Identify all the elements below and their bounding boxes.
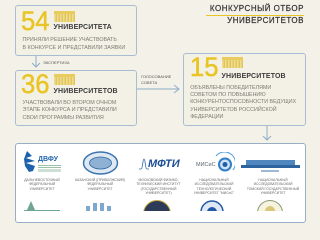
label: council vote: СОВЕТА xyxy=(141,80,157,85)
logo text: МФТИ xyxy=(148,158,180,170)
caption: MISiS: НАЦИОНАЛЬНЫЙ xyxy=(199,178,229,182)
caption: DVFU: ФЕДЕРАЛЬНЫЙ xyxy=(29,182,55,186)
text: 54: ПРИНЯЛИ РЕШЕНИЕ УЧАСТВОВАТЬ xyxy=(22,36,117,42)
label: council vote: ГОЛОСОВАНИЕ xyxy=(141,74,171,79)
panel: 15 universities xyxy=(183,53,306,126)
caption: MIPT: (ГОСУДАРСТВЕННЫЙ xyxy=(141,187,176,191)
text: 36: СВОИ ПРОГРАММЫ РАЗВИТИЯ xyxy=(22,115,104,121)
text: 15 xyxy=(190,85,296,120)
number 54: 54 xyxy=(20,6,49,36)
icon: building xyxy=(54,74,74,84)
caption: MIPT: УНИВЕРСИТЕТ) xyxy=(145,191,172,195)
icon: ring xyxy=(216,152,235,172)
logo: MISiS xyxy=(196,152,235,172)
logo: DVFU xyxy=(24,151,61,172)
caption: Kazan: КАЗАНСКИЙ (ПРИВОЛЖСКИЙ) xyxy=(75,178,125,182)
text: 36 xyxy=(22,100,117,121)
icon: building xyxy=(222,56,242,68)
text: 15: ФЕДЕРАЦИИ xyxy=(190,114,223,120)
logo: Tomsk xyxy=(241,160,300,172)
caption: Tomsk: ИССЛЕДОВАТЕЛЬСКИЙ xyxy=(254,182,292,186)
text: 54: В КОНКУРСЕ И ПРЕДСТАВИЛИ ЗАЯВКИ xyxy=(22,44,125,50)
logo: MIPT xyxy=(139,158,180,170)
caption: Kazan: ФЕДЕРАЛЬНЫЙ xyxy=(87,182,113,186)
caption: Tomsk: НАЦИОНАЛЬНЫЙ xyxy=(258,178,288,182)
number 15: 15 xyxy=(190,52,219,82)
caption: MISiS: ТЕХНОЛОГИЧЕСКИЙ xyxy=(197,187,231,191)
caption: DVFU xyxy=(24,178,60,191)
caption: Tomsk: УНИВЕРСИТЕТ xyxy=(260,191,286,195)
logo: row 2, fourth xyxy=(200,200,224,211)
title xyxy=(206,3,304,24)
text: 36: УЧАСТВОВАЛИ ВО ВТОРОМ ОЧНОМ xyxy=(22,100,116,106)
logo text: ДВФУ xyxy=(38,156,58,162)
caption: DVFU: ДАЛЬНЕВОСТОЧНЫЙ xyxy=(24,178,60,182)
text: 15: УНИВЕРСИТЕТОВ РОССИЙСКОЙ xyxy=(190,107,277,113)
logo text: МИСиС xyxy=(196,162,216,168)
title: КОНКУРСНЫЙ ОТБОР xyxy=(210,4,304,13)
heading: 54: УНИВЕРСИТЕТА xyxy=(54,24,112,31)
panel: university logos xyxy=(15,143,306,223)
icon: sail xyxy=(24,151,35,172)
caption: MISiS: ИССЛЕДОВАТЕЛЬСКИЙ xyxy=(195,182,233,186)
panel: 36 universities xyxy=(15,70,137,126)
panel: 54 universities xyxy=(15,5,137,56)
text: 36: ЭТАПЕ КОНКУРСА И ПРЕДСТАВИЛИ xyxy=(22,107,117,113)
caption: Kazan xyxy=(75,178,125,191)
caption: Tomsk: ТОМСКИЙ ГОСУДАРСТВЕННЫЙ xyxy=(247,187,299,191)
logo subtext xyxy=(38,165,61,172)
caption: MIPT: ТЕХНИЧЕСКИЙ ИНСТИТУТ xyxy=(136,182,181,186)
caption: DVFU: УНИВЕРСИТЕТ xyxy=(29,187,55,191)
logo: row 2, fifth xyxy=(257,200,283,211)
caption: MIPT: МОСКОВСКИЙ ФИЗИКО- xyxy=(138,178,179,182)
text: 54 xyxy=(22,36,125,50)
text: 15: КОНКУРЕНТОСПОСОБНОСТИ ВЕДУЩИХ xyxy=(190,99,296,105)
caption: MIPT xyxy=(136,178,181,195)
number 36: 36 xyxy=(20,68,49,98)
icon: peak xyxy=(139,158,149,170)
arrow: expertise xyxy=(32,56,40,68)
icon: building xyxy=(54,10,74,22)
label: expertise: ЭКСПЕРТИЗА xyxy=(43,60,69,64)
heading: 36: УНИВЕРСИТЕТОВ xyxy=(54,88,118,95)
logo: Kazan xyxy=(82,151,118,175)
logo: row 2, second xyxy=(86,203,111,211)
logo: row 2, third xyxy=(143,200,171,211)
logo: row 2, first xyxy=(24,201,60,211)
label: council vote xyxy=(141,74,172,85)
caption: MISiS xyxy=(194,178,234,195)
caption: Tomsk xyxy=(247,178,299,195)
arrow: to 15 xyxy=(137,84,180,94)
arrow: down to logos xyxy=(262,126,272,141)
heading: 15: УНИВЕРСИТЕТОВ xyxy=(222,72,286,80)
title: УНИВЕРСИТЕТОВ xyxy=(227,16,304,24)
caption: MISiS: УНИВЕРСИТЕТ "МИСиС" xyxy=(194,191,234,195)
text: 15: ОБЪЯВЛЕНЫ ПОБЕДИТЕЛЯМИ xyxy=(190,85,271,91)
caption: Kazan: УНИВЕРСИТЕТ xyxy=(87,187,113,191)
text: 15: СОВЕТОМ ПО ПОВЫШЕНИЮ xyxy=(190,92,266,98)
